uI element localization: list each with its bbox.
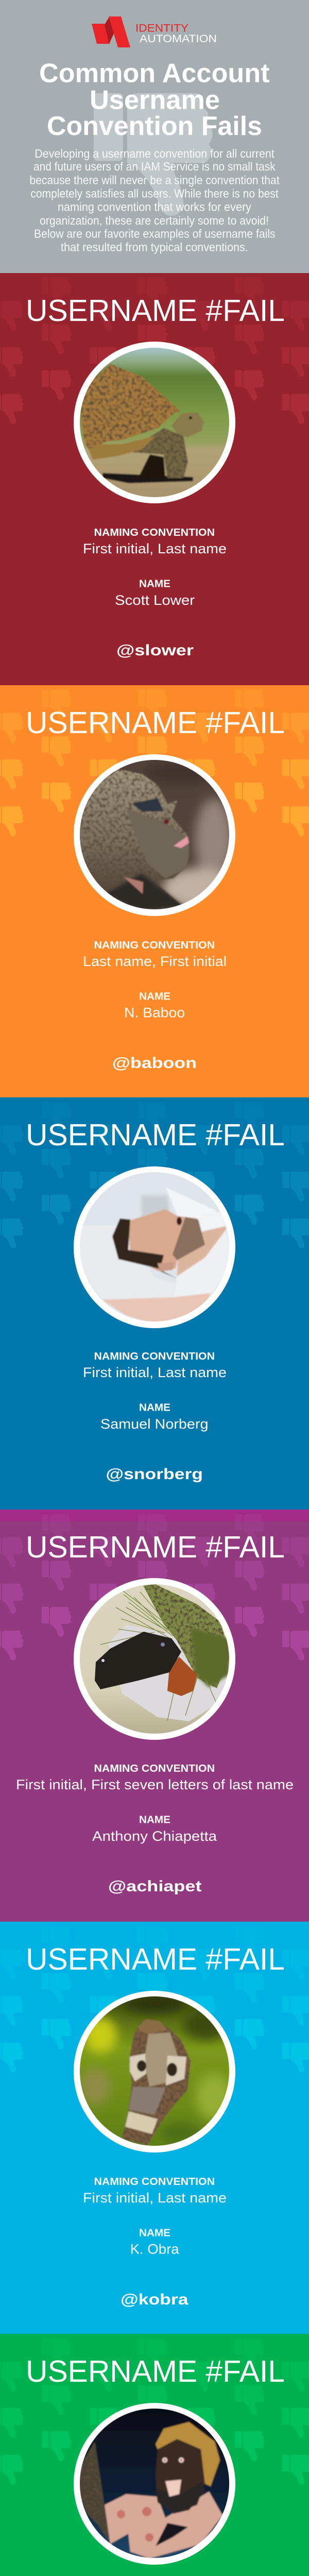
logo: Identity Automation: AUTOMATION xyxy=(140,33,217,45)
name label: NAME xyxy=(139,2228,170,2239)
intro text block: organization, these are certainly some to avoid! xyxy=(40,214,269,227)
name value: Samuel Norberg xyxy=(100,1416,208,1432)
photo: tortoise xyxy=(74,342,235,503)
username handle: @snorberg xyxy=(106,1466,203,1483)
naming convention label: NAMING CONVENTION xyxy=(94,1763,215,1774)
intro text block: that resulted from typical conventions. xyxy=(61,240,248,253)
name label: NAME xyxy=(139,1815,170,1826)
title: Common Account xyxy=(39,59,270,89)
panel: kobra xyxy=(0,1922,309,2334)
panel: intro header xyxy=(0,0,309,273)
naming convention label: NAMING CONVENTION xyxy=(94,1351,215,1362)
name value: Anthony Chiapetta xyxy=(92,1828,217,1844)
naming convention label: NAMING CONVENTION xyxy=(94,2176,215,2188)
logo: Identity Automation xyxy=(92,16,217,47)
intro text block: completely satisfies all users. While there is no best xyxy=(30,187,279,200)
intro text block: and future users of an IAM Service is no small task xyxy=(33,160,276,173)
intro text block: Below are our favorite examples of username fails xyxy=(34,227,276,240)
intro text block: Developing a username convention for all current xyxy=(35,147,274,160)
naming convention value: First initial, Last name xyxy=(83,2190,227,2206)
photo: chia pet alligator xyxy=(74,1578,235,1740)
photo: beast man xyxy=(74,2403,235,2565)
photo: sleeping man xyxy=(74,1166,235,1328)
naming convention value: First initial, First seven letters of last name xyxy=(16,1777,294,1792)
naming convention value: Last name, First initial xyxy=(83,954,227,969)
intro text block: naming convention that works for every xyxy=(58,200,251,214)
name value: K. Obra xyxy=(130,2241,180,2257)
name value: Scott Lower xyxy=(115,592,195,608)
title xyxy=(39,59,270,141)
name label: NAME xyxy=(139,1402,170,1414)
panel: snorberg xyxy=(0,1097,309,1510)
logo: Identity Automation: IDENTITY xyxy=(135,23,188,34)
panel: slower xyxy=(0,273,309,685)
heading: USERNAME #FAIL xyxy=(26,1118,285,1152)
username handle: @achiapet xyxy=(108,1878,202,1895)
name label: NAME xyxy=(139,579,170,590)
naming convention label: NAMING CONVENTION xyxy=(94,527,215,538)
panel: baboon xyxy=(0,685,309,1097)
icon: large thumbs down watermark xyxy=(94,93,213,216)
heading: USERNAME #FAIL xyxy=(26,1942,285,1976)
heading: USERNAME #FAIL xyxy=(26,1530,285,1564)
naming convention label: NAMING CONVENTION xyxy=(94,940,215,951)
photo: cobra xyxy=(74,1991,235,2153)
username handle: @baboon xyxy=(112,1055,197,1072)
panel: beastman xyxy=(0,2334,309,2576)
name value: N. Baboo xyxy=(124,1005,185,1020)
naming convention value: First initial, Last name xyxy=(83,1365,227,1380)
panel: achiapet xyxy=(0,1510,309,1922)
intro text block xyxy=(29,147,280,253)
heading: USERNAME #FAIL xyxy=(26,294,285,328)
title: Convention Fails xyxy=(47,111,262,141)
username handle: @kobra xyxy=(121,2291,188,2308)
naming convention value: First initial, Last name xyxy=(83,541,227,556)
photo: baboon xyxy=(74,754,235,916)
heading: USERNAME #FAIL xyxy=(26,2354,285,2388)
name label: NAME xyxy=(139,991,170,1003)
title: Username xyxy=(90,85,220,115)
intro text block: because there will never be a single convention that xyxy=(29,174,280,187)
username handle: @slower xyxy=(116,642,194,659)
heading: USERNAME #FAIL xyxy=(26,706,285,740)
